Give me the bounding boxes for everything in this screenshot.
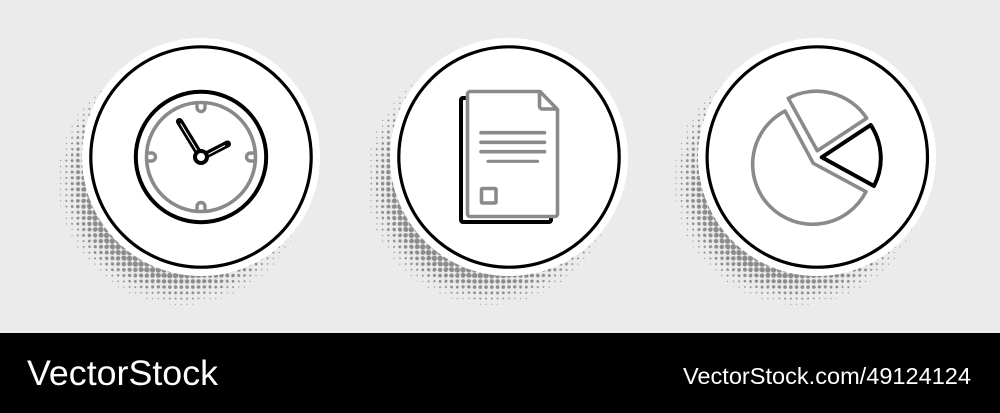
panel: document badge [366,38,628,305]
badge circle: clock [82,38,320,276]
icon: clock [136,92,266,222]
panel: clock badge [58,38,320,305]
badge circle: document [390,38,628,276]
footer bar [0,333,1000,413]
halftone shadow: document [366,57,614,305]
logo text: VectorStock [27,354,219,393]
icon: pie chart [753,91,881,224]
halftone shadow: clock [58,57,306,305]
badge circle: pie chart [698,38,936,276]
panel: pie chart badge [674,38,936,305]
image id text: VectorStock.com/49124124 [683,363,971,389]
halftone shadow: pie chart [674,57,922,305]
icon: document stack [461,92,558,222]
